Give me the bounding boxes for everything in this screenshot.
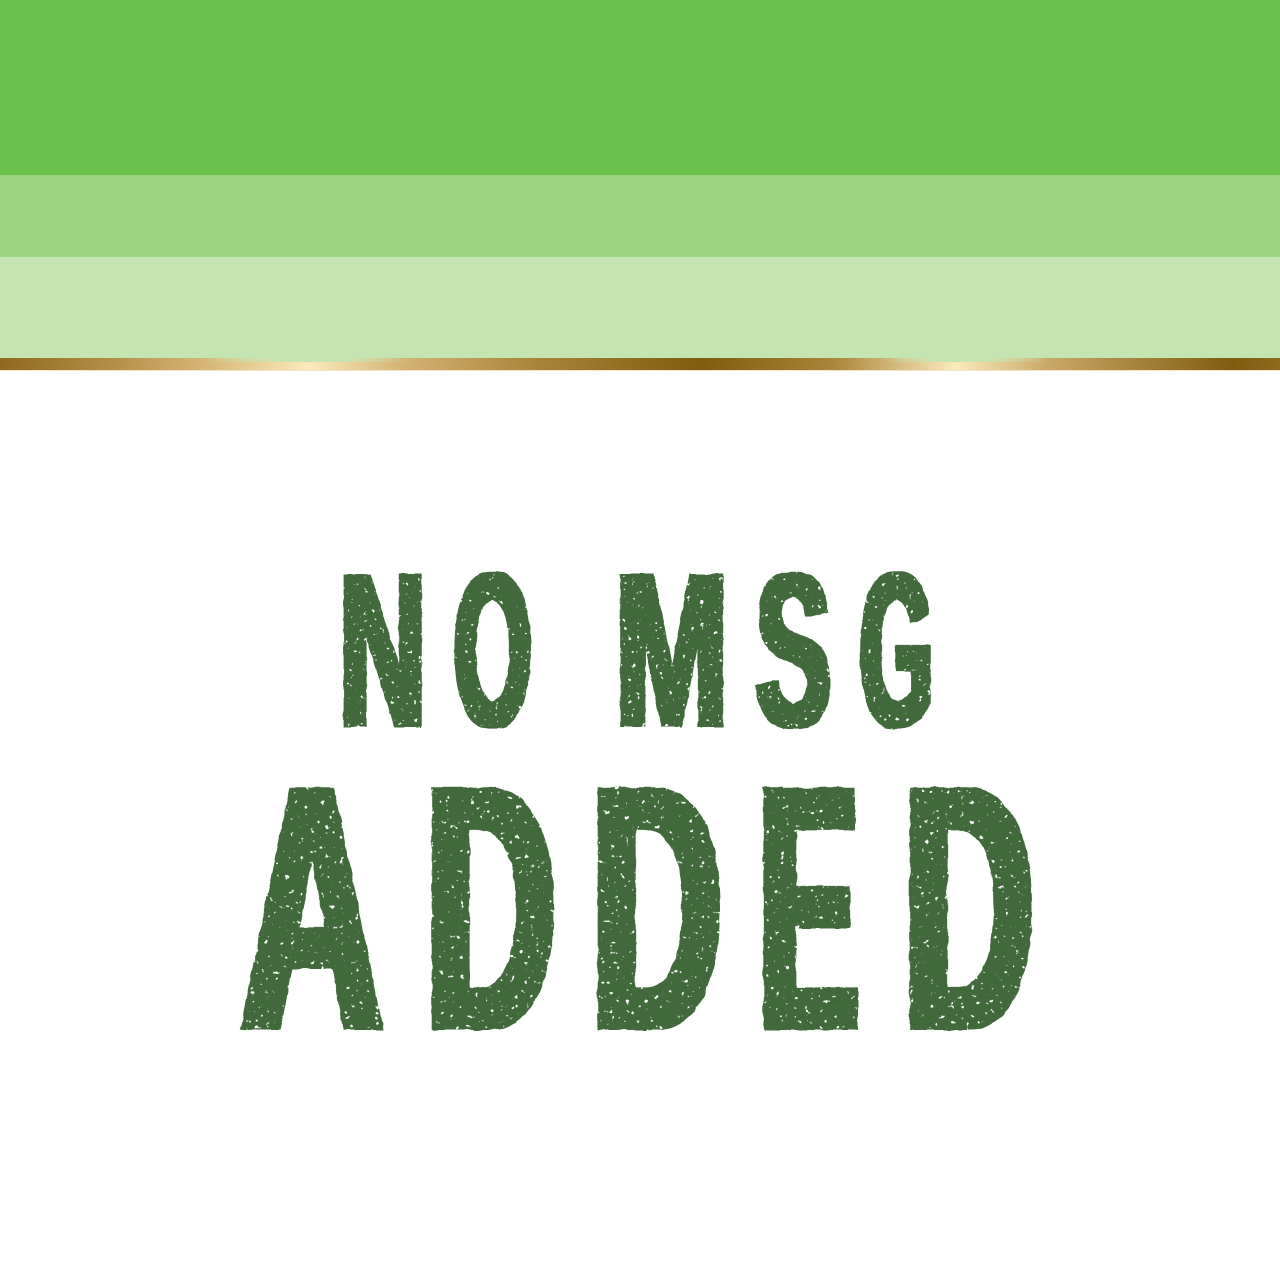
heading line: ADDED: A [242,714,382,1102]
heading line: ADDED: D [904,714,1034,1102]
band: gold foil stripe [0,358,1280,371]
heading line: ADDED: E [759,714,858,1102]
band: medium green stripe [0,175,1280,257]
heading line: NO MSG: M [615,529,728,772]
heading line: NO MSG: N [339,530,426,773]
band: light green stripe [0,257,1280,359]
heading line: NO MSG: S [756,528,831,772]
heading line: ADDED: D [426,714,556,1102]
title: NO MSG ADDED [242,528,1034,1102]
heading line: NO MSG [339,528,933,773]
heading line: ADDED: D [592,714,722,1102]
heading line: NO MSG: O [454,529,531,772]
heading line: NO MSG: G [860,528,933,772]
band: dark green stripe [0,0,1280,175]
heading line: ADDED [242,714,1034,1102]
